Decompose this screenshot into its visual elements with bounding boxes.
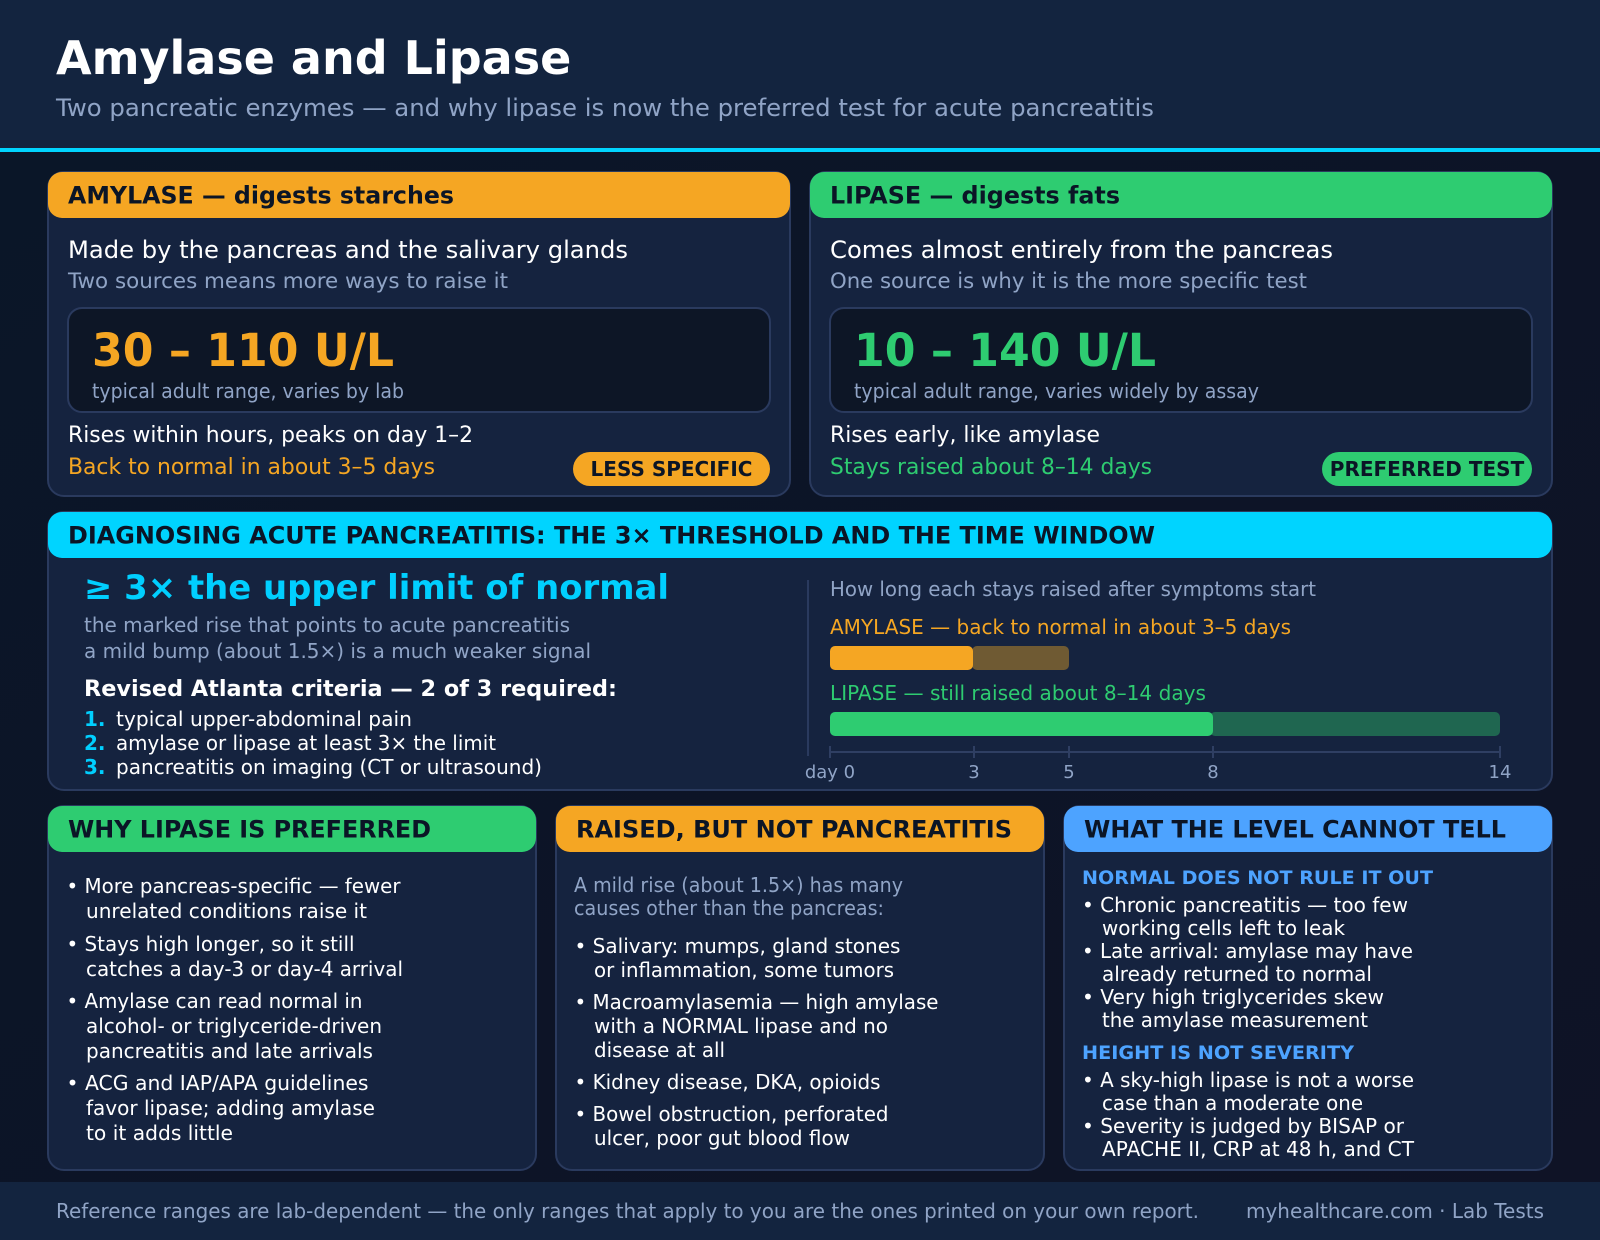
threshold statement: a mild bump (about 1.5×) is a much weaker signal xyxy=(84,639,591,663)
badge: preferred test xyxy=(1322,452,1532,486)
why lipase bullets xyxy=(66,874,403,1145)
why lipase bullets: to it adds little xyxy=(86,1121,233,1145)
lipase heading: LIPASE — digests fats xyxy=(830,182,1120,210)
panel: what the level cannot tell xyxy=(1064,806,1552,1170)
lipase source xyxy=(830,236,1333,293)
raised heading: RAISED, BUT NOT PANCREATITIS xyxy=(576,816,1012,844)
height is not severity xyxy=(1082,1042,1415,1161)
raised bullets: or inflammation, some tumors xyxy=(594,958,894,982)
height is not severity: case than a moderate one xyxy=(1102,1091,1363,1115)
lipase source: Comes almost entirely from the pancreas xyxy=(830,236,1333,264)
amylase heading xyxy=(48,172,790,218)
raised heading xyxy=(556,806,1044,852)
timeline chart xyxy=(805,577,1511,783)
footer xyxy=(0,1182,1600,1240)
threshold statement: the marked rise that points to acute pancreatitis xyxy=(84,613,570,637)
raised bullets: • Macroamylasemia — high amylase xyxy=(574,990,938,1014)
time axis: 3 xyxy=(968,762,980,783)
height is not severity: APACHE II, CRP at 48 h, and CT xyxy=(1102,1137,1415,1161)
time axis: 14 xyxy=(1489,762,1511,783)
why lipase bullets: unrelated conditions raise it xyxy=(86,899,367,923)
threshold statement: ≥ 3× the upper limit of normal xyxy=(84,568,669,608)
badge: less specific xyxy=(573,452,770,486)
why lipase bullets: • More pancreas-specific — fewer xyxy=(66,874,401,898)
normal does not rule it out: • Very high triglycerides skew xyxy=(1082,985,1384,1009)
height is not severity: • Severity is judged by BISAP or xyxy=(1082,1114,1405,1138)
raised bullets: disease at all xyxy=(594,1038,725,1062)
time axis: 5 xyxy=(1063,762,1075,783)
why lipase bullets: favor lipase; adding amylase xyxy=(86,1096,375,1120)
raised bullets: with a NORMAL lipase and no xyxy=(594,1014,888,1038)
footer: myhealthcare.com · Lab Tests xyxy=(1246,1199,1544,1223)
footer: Reference ranges are lab-dependent — the only ranges that apply to you are the ones printed on your own report. xyxy=(56,1199,1199,1223)
revised Atlanta criteria: 2. xyxy=(84,731,106,755)
why lipase bullets: • ACG and IAP/APA guidelines xyxy=(66,1071,368,1095)
why lipase heading xyxy=(48,806,536,852)
lipase timing: Rises early, like amylase xyxy=(830,423,1100,448)
cannot tell heading xyxy=(1064,806,1552,852)
height is not severity: • A sky-high lipase is not a worse xyxy=(1082,1068,1414,1092)
revised Atlanta criteria: 3. xyxy=(84,755,106,779)
panel: amylase xyxy=(48,172,790,496)
amylase source: Made by the pancreas and the salivary glands xyxy=(68,236,628,264)
amylase source xyxy=(67,236,628,293)
raised bullets: ulcer, poor gut blood flow xyxy=(594,1126,850,1150)
lipase reference range: typical adult range, varies widely by assay xyxy=(854,379,1259,403)
normal does not rule it out: working cells left to leak xyxy=(1102,916,1345,940)
lipase source: One source is why it is the more specific test xyxy=(830,269,1307,293)
normal does not rule it out: • Late arrival: amylase may have xyxy=(1082,939,1413,963)
lipase heading xyxy=(810,172,1552,218)
amylase source: Two sources means more ways to raise it xyxy=(67,269,508,293)
why lipase heading: WHY LIPASE IS PREFERRED xyxy=(68,816,431,844)
subtitle: Two pancreatic enzymes — and why lipase is now the preferred test for acute pancreatitis xyxy=(55,94,1154,122)
revised Atlanta criteria: amylase or lipase at least 3× the limit xyxy=(116,731,496,755)
why lipase bullets: alcohol- or triglyceride-driven xyxy=(86,1014,382,1038)
raised bullets: • Bowel obstruction, perforated xyxy=(574,1102,888,1126)
amylase reference range: typical adult range, varies by lab xyxy=(92,379,404,403)
amylase heading: AMYLASE — digests starches xyxy=(68,182,454,210)
lipase reference range: 10 – 140 U/L xyxy=(854,324,1156,377)
time axis: 8 xyxy=(1207,762,1219,783)
diagnosis heading xyxy=(48,512,1552,558)
raised intro: causes other than the pancreas: xyxy=(574,896,884,920)
raised intro xyxy=(574,873,903,920)
time axis xyxy=(805,746,1511,783)
raised bullets xyxy=(574,934,938,1150)
amylase timing: Back to normal in about 3–5 days xyxy=(68,455,435,480)
time axis: day 0 xyxy=(805,762,855,783)
normal does not rule it out: already returned to normal xyxy=(1102,962,1372,986)
amylase reference range xyxy=(68,308,770,412)
normal does not rule it out: NORMAL DOES NOT RULE IT OUT xyxy=(1082,867,1433,889)
badge: less specific: LESS SPECIFIC xyxy=(591,457,752,481)
amylase timeline: AMYLASE — back to normal in about 3–5 days xyxy=(830,615,1291,639)
why lipase bullets: • Stays high longer, so it still xyxy=(66,932,354,956)
normal does not rule it out xyxy=(1082,867,1433,1032)
why lipase bullets: • Amylase can read normal in xyxy=(66,989,362,1013)
height is not severity: HEIGHT IS NOT SEVERITY xyxy=(1082,1042,1354,1064)
amylase reference range: 30 – 110 U/L xyxy=(92,324,394,377)
lipase timing xyxy=(830,423,1152,480)
lipase timeline: LIPASE — still raised about 8–14 days xyxy=(830,681,1206,705)
why lipase bullets: catches a day-3 or day-4 arrival xyxy=(86,957,403,981)
badge: preferred test: PREFERRED TEST xyxy=(1330,457,1525,481)
why lipase bullets: pancreatitis and late arrivals xyxy=(86,1039,373,1063)
amylase timing: Rises within hours, peaks on day 1–2 xyxy=(68,423,473,448)
lipase timing: Stays raised about 8–14 days xyxy=(830,455,1152,480)
threshold statement xyxy=(84,568,669,663)
header band xyxy=(0,0,1600,152)
revised Atlanta criteria: Revised Atlanta criteria — 2 of 3 required: xyxy=(84,677,617,702)
revised Atlanta criteria xyxy=(84,677,617,779)
amylase timeline xyxy=(830,615,1291,670)
normal does not rule it out: • Chronic pancreatitis — too few xyxy=(1082,893,1408,917)
diagnosis heading: DIAGNOSING ACUTE PANCREATITIS: THE 3× THRESHOLD AND THE TIME WINDOW xyxy=(68,522,1155,550)
cannot tell heading: WHAT THE LEVEL CANNOT TELL xyxy=(1084,816,1506,844)
raised intro: A mild rise (about 1.5×) has many xyxy=(574,873,903,897)
normal does not rule it out: the amylase measurement xyxy=(1102,1008,1368,1032)
panel: why lipase is preferred xyxy=(48,806,536,1170)
panel: lipase xyxy=(810,172,1552,496)
title: Amylase and Lipase xyxy=(56,31,571,85)
raised bullets: • Kidney disease, DKA, opioids xyxy=(574,1070,880,1094)
revised Atlanta criteria: typical upper-abdominal pain xyxy=(116,707,412,731)
lipase reference range xyxy=(830,308,1532,412)
revised Atlanta criteria: 1. xyxy=(84,707,106,731)
lipase timeline xyxy=(830,681,1500,736)
amylase timing xyxy=(68,423,473,480)
panel: diagnosing acute pancreatitis xyxy=(48,512,1552,790)
panel: raised but not pancreatitis xyxy=(556,806,1044,1170)
revised Atlanta criteria: pancreatitis on imaging (CT or ultrasound) xyxy=(116,755,542,779)
raised bullets: • Salivary: mumps, gland stones xyxy=(574,934,900,958)
timeline chart: How long each stays raised after symptoms start xyxy=(830,577,1316,601)
